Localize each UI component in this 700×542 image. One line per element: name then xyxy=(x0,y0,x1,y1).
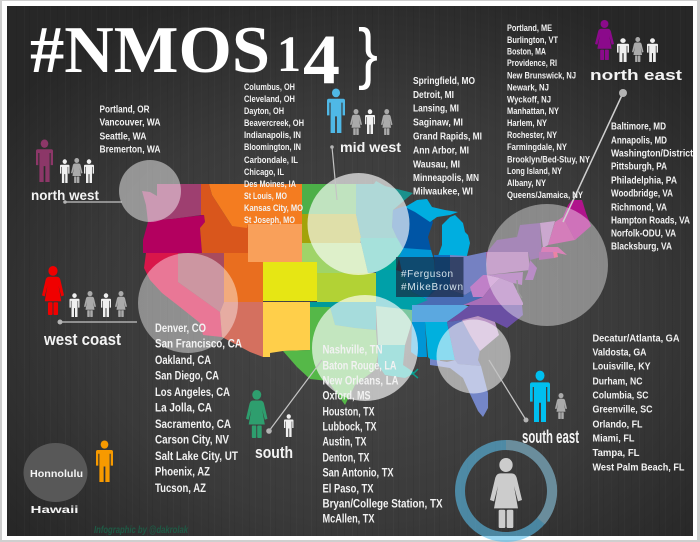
city list: south east: Orlando, FL xyxy=(592,418,643,430)
city list: north east column 2: Woodbridge, VA xyxy=(611,188,673,200)
city list: south east: Greenville, SC xyxy=(592,404,653,416)
city list: mid west column 2: Wausau, MI xyxy=(413,158,460,170)
title: #NMOS xyxy=(30,13,270,87)
city list: mid west column 1: Cleveland, OH xyxy=(244,94,295,105)
city list: west coast: Oakland, CA xyxy=(155,353,211,367)
region circle: north west xyxy=(119,160,181,222)
city list: west coast: San Francisco, CA xyxy=(155,336,242,350)
icon: south people xyxy=(246,390,294,438)
city list: south: New Orleans, LA xyxy=(322,374,399,388)
icon: north east people xyxy=(595,20,658,62)
city list: mid west column 1: Des Moines, IA xyxy=(244,179,296,190)
label: Honnolulu: Honnolulu xyxy=(30,468,83,480)
map of the United States xyxy=(142,181,591,417)
city list: mid west column 2: Grand Rapids, MI xyxy=(413,130,482,142)
city list: south: Bryan/College Station, TX xyxy=(322,496,442,510)
city list: south east: Valdosta, GA xyxy=(592,346,647,358)
city list: mid west column 1: St Joseph, MO xyxy=(244,215,295,226)
city list: south: McAllen, TX xyxy=(322,512,374,526)
city list: north east column 1: Wyckoff, NJ xyxy=(507,94,551,106)
city list: mid west column 1: Dayton, OH xyxy=(244,106,284,117)
region circle: south east xyxy=(436,320,510,394)
city list: south: El Paso, TX xyxy=(322,482,374,496)
city list: mid west column 1: Chicago, IL xyxy=(244,167,284,178)
city list: mid west column 1: Beavercreek, OH xyxy=(244,118,304,129)
city list: south east xyxy=(592,332,685,474)
city list: south: Houston, TX xyxy=(322,404,374,418)
city list: mid west column 1: Kansas City, MO xyxy=(244,203,303,214)
hashtag box: #Ferguson xyxy=(401,269,453,280)
city list: north west: Vancouver, WA xyxy=(100,116,161,128)
city list: north east column 2: Richmond, VA xyxy=(611,202,667,214)
city list: mid west column 2: Minneapolis, MN xyxy=(413,172,479,184)
city list: south east: Durham, NC xyxy=(592,376,643,388)
region circle: south xyxy=(312,295,418,401)
west coast block xyxy=(42,266,242,495)
city list: south east: Louisville, KY xyxy=(592,360,650,372)
city list: west coast: Tucson, AZ xyxy=(155,481,206,495)
city list: mid west column 1: St Louis, MO xyxy=(244,191,287,202)
city list: south east: Miami, FL xyxy=(592,432,635,444)
city list: mid west column 1: Indianapolis, IN xyxy=(244,130,301,141)
city list: north east column 1: Burlington, VT xyxy=(507,35,558,46)
region circle: mid west xyxy=(308,173,410,275)
city list: west coast: San Diego, CA xyxy=(155,368,219,382)
city list: north east column 1: New Brunswick, NJ xyxy=(507,70,576,82)
city list: north east column 1: Providence, RI xyxy=(507,58,557,69)
city list: south: Nashville, TN xyxy=(322,342,382,356)
heading: Hawaii: Hawaii xyxy=(30,504,79,516)
city list: north east column 1: Newark, NJ xyxy=(507,82,549,94)
hashtag box xyxy=(396,257,464,297)
city list: mid west column 2: Milwaukee, WI xyxy=(413,186,473,198)
city list: west coast xyxy=(155,321,242,495)
city list: north east column 1: Boston, MA xyxy=(507,46,546,58)
city list: mid west column 1: Carbondale, IL xyxy=(244,155,298,166)
circle: Honolulu xyxy=(24,443,88,502)
north east block xyxy=(507,20,693,252)
city list: north east column 2: Philadelphia, PA xyxy=(611,174,677,186)
city list: west coast: Carson City, NV xyxy=(155,432,229,446)
city list: north east column 1: Farmingdale, NY xyxy=(507,142,568,153)
city list: north east column 2: Blacksburg, VA xyxy=(611,240,672,252)
city list: west coast: Denver, CO xyxy=(155,321,206,335)
city list: south: Lubbock, TX xyxy=(322,420,376,434)
city list: south: Oxford, MS xyxy=(322,388,370,402)
city list: south east: Decatur/Atlanta, GA xyxy=(592,332,680,344)
city list: west coast: Sacramento, CA xyxy=(155,417,231,431)
city list: south east: Columbia, SC xyxy=(592,390,649,402)
city list: north east column 1: Brooklyn/Bed-Stuy, NY xyxy=(507,154,591,166)
city list: north east column 2 xyxy=(611,120,693,252)
city list: north east column 1: Queens/Jamaica, NY xyxy=(507,190,584,201)
mid west block xyxy=(244,75,482,226)
title: 4 xyxy=(303,21,340,99)
city list: mid west column 2 xyxy=(413,75,482,198)
city list: north east column 1 xyxy=(507,23,591,201)
region circle: west coast xyxy=(138,253,238,353)
city list: north east column 1: Rochester, NY xyxy=(507,130,558,141)
icon: woman xyxy=(490,458,522,528)
city list: north east column 2: Baltimore, MD xyxy=(611,120,666,132)
credit: Infographic by @dakrolak xyxy=(94,525,188,536)
heading: north east: north east xyxy=(590,67,682,84)
city list: north east column 1: Long Island, NY xyxy=(507,166,563,177)
hawaii block xyxy=(24,440,113,516)
heading: west coast: west coast xyxy=(43,330,121,349)
city list: north east column 1: Harlem, NY xyxy=(507,118,548,129)
city list: west coast: La Jolla, CA xyxy=(155,400,212,414)
city list: mid west column 2: Detroit, MI xyxy=(413,89,454,101)
city list: north west xyxy=(100,104,161,156)
city list: west coast: Phoenix, AZ xyxy=(155,464,210,478)
city list: north west: Bremerton, WA xyxy=(100,144,161,156)
icon: hawaii person xyxy=(96,440,113,482)
city list: mid west column 2: Saginaw, MI xyxy=(413,116,463,128)
city list: south: San Antonio, TX xyxy=(322,466,394,480)
icon: west coast people xyxy=(42,266,127,317)
city list: mid west column 2: Springfield, MO xyxy=(413,75,475,87)
heading: mid west: mid west xyxy=(340,139,401,155)
city list: north west: Portland, OR xyxy=(100,104,150,116)
north west block xyxy=(31,104,161,203)
city list: south xyxy=(322,342,442,526)
hashtag box: #MikeBrown xyxy=(401,282,463,293)
city list: south: Austin, TX xyxy=(322,434,366,448)
leader lines xyxy=(58,89,627,434)
city list: north east column 2: Pittsburgh, PA xyxy=(611,160,667,172)
city list: north east column 2: Annapolis, MD xyxy=(611,134,667,146)
city list: mid west column 1: Bloomington, IN xyxy=(244,142,301,153)
city list: west coast: Salt Lake City, UT xyxy=(155,449,239,463)
city list: south east: Tampa, FL xyxy=(592,447,640,459)
city list: north east column 2: Norfolk-ODU, VA xyxy=(611,228,676,240)
city list: south east: West Palm Beach, FL xyxy=(592,462,685,474)
south east block xyxy=(522,332,685,474)
title xyxy=(30,13,340,99)
city list: west coast: Los Angeles, CA xyxy=(155,385,230,399)
city list: south: Denton, TX xyxy=(322,450,370,464)
region circle: north east xyxy=(486,204,608,326)
city list: north east column 1: Albany, NY xyxy=(507,178,547,189)
city list: north east column 1: Portland, ME xyxy=(507,23,552,34)
heading: north west: north west xyxy=(31,187,99,203)
heading: south: south xyxy=(255,443,293,462)
city list: mid west column 2: Ann Arbor, MI xyxy=(413,144,469,156)
city list: mid west column 1 xyxy=(244,82,304,226)
heading: south east: south east xyxy=(522,427,579,447)
title brace: } xyxy=(358,15,378,91)
icon: south east people xyxy=(530,371,567,422)
icon: mid west people xyxy=(327,88,392,135)
city list: mid west column 2: Lansing, MI xyxy=(413,102,459,114)
donut chart with woman xyxy=(460,445,552,537)
title: 1 xyxy=(277,27,301,83)
city list: north east column 1: Manhattan, NY xyxy=(507,106,560,117)
city list: north west: Seattle, WA xyxy=(100,130,147,142)
city list: mid west column 1: Columbus, OH xyxy=(244,82,295,93)
city list: south: Baton Rouge, LA xyxy=(322,358,397,372)
icon: north west people xyxy=(36,139,94,183)
south block xyxy=(246,342,442,526)
